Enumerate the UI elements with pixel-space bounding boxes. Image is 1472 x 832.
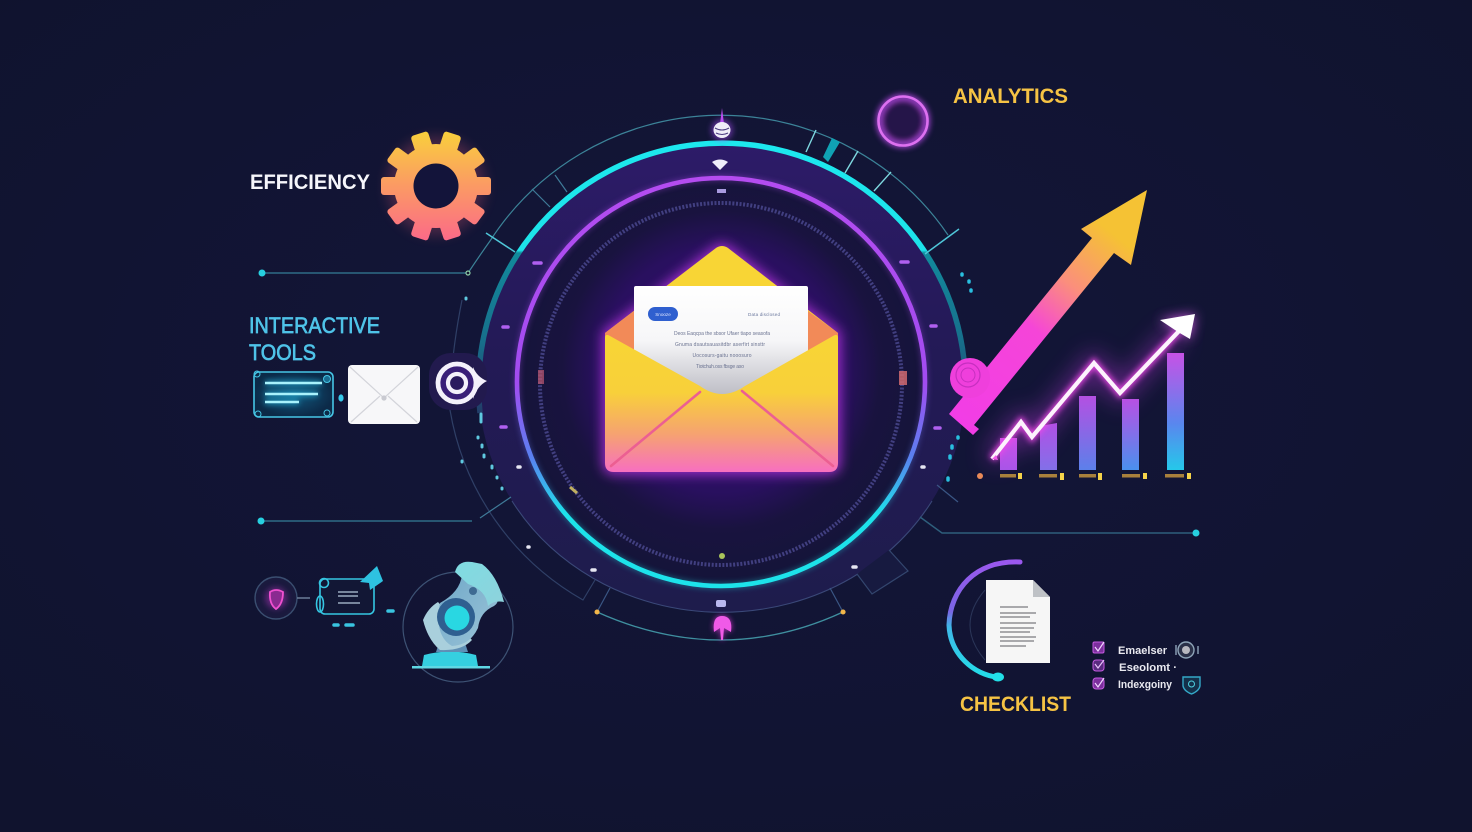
right connector	[920, 517, 1200, 536]
icon: eye target	[429, 353, 487, 410]
big rising arrow	[949, 190, 1147, 435]
icon: send card	[316, 566, 383, 614]
dotted text ring	[540, 203, 902, 565]
interactive tools label: TOOLS	[249, 340, 316, 365]
top icon: spike	[720, 108, 724, 124]
checklist section	[949, 562, 1200, 716]
side marker right	[899, 371, 907, 385]
badge connector	[297, 597, 310, 599]
icon: gear hole	[413, 163, 459, 209]
icon: message card	[254, 371, 333, 417]
letter body text: Uocosurs-gaitu nooosuro	[692, 353, 752, 359]
checklist items	[1093, 642, 1200, 694]
bars	[1000, 353, 1184, 470]
icon: robot arm	[403, 562, 513, 682]
pink bottom icon glow	[714, 616, 731, 640]
item labels: Indexgoiny	[1118, 679, 1173, 691]
lower left automation section	[255, 518, 513, 682]
checkbox 2	[1093, 660, 1104, 671]
lower-right box	[857, 550, 908, 594]
central envelope	[605, 246, 838, 472]
icon: analytics ring	[878, 96, 928, 146]
document icon	[986, 580, 1050, 663]
purple band glyphs	[501, 262, 940, 428]
top icon: chevron	[712, 160, 728, 170]
icon: analytics ring glow	[879, 97, 927, 145]
axis squares	[1018, 473, 1191, 480]
card dot	[338, 394, 344, 402]
side marker left	[538, 370, 544, 384]
letter body text	[674, 331, 770, 370]
lower teal arc	[597, 612, 843, 640]
bottom band icon	[716, 600, 726, 607]
letter body text: Deos Eaqcpa the sbsor Ufaer tiapo seasofa	[674, 331, 770, 337]
inner faint arc	[970, 590, 985, 660]
interactive tools section	[249, 313, 487, 424]
checklist label: CHECKLIST	[960, 692, 1071, 716]
back flap	[605, 246, 838, 380]
top ticks	[806, 130, 891, 191]
efficiency label: EFFICIENCY	[250, 170, 370, 194]
gradient ring glow	[517, 178, 925, 586]
interactive tools label	[249, 313, 380, 365]
item labels: Emaelser	[1118, 645, 1168, 657]
item labels: Eseolomt ·	[1119, 662, 1177, 674]
inner flap shade	[605, 311, 838, 380]
bar chart with trend line	[977, 314, 1195, 480]
right side dots	[948, 274, 971, 480]
trend start tip	[992, 455, 998, 460]
gradient ring	[517, 178, 925, 586]
envelope fold lines	[611, 391, 833, 466]
top icon: dome	[714, 122, 730, 138]
checkbox 3	[1093, 678, 1104, 689]
connector end node	[466, 271, 470, 275]
envelope glow	[605, 246, 838, 472]
analytics section	[878, 84, 1068, 146]
envelope front pocket	[605, 335, 838, 472]
top icon: small bar	[717, 189, 726, 193]
blue pill button	[648, 307, 678, 321]
faint side ticks	[480, 175, 567, 518]
arrow base rose	[950, 358, 990, 398]
letter	[634, 286, 808, 396]
upper cyan ring	[479, 143, 964, 413]
bottom band dots	[518, 467, 924, 570]
icon: badge	[1176, 642, 1198, 658]
icon: shield badge	[255, 577, 297, 619]
letter body text: Tiotchuh.oss fbsge aso	[696, 364, 744, 370]
icon: gear glow	[386, 136, 486, 236]
lower arc connectors	[597, 485, 958, 612]
connector dot	[258, 270, 266, 276]
icon: white envelope	[348, 365, 420, 424]
letter body text: Gnuma dsautsauasitdbr aserfirt sinsttr	[675, 342, 765, 348]
central ring dial	[450, 108, 971, 640]
icon: gear	[381, 132, 491, 240]
trend arrow head	[1160, 314, 1195, 339]
cyan side ticks	[486, 229, 959, 254]
axis ticks	[1000, 474, 1184, 478]
icon: shield	[1183, 677, 1200, 694]
left thin arc	[450, 300, 595, 600]
analytics label: ANALYTICS	[953, 84, 1068, 108]
connector line	[261, 520, 472, 522]
band lower outline	[512, 501, 932, 612]
connector dot	[258, 518, 264, 524]
trend line outer haze	[992, 332, 1178, 459]
checkbox 1	[1093, 642, 1104, 653]
core disc	[517, 178, 925, 586]
pink bottom icon	[714, 616, 731, 640]
connector dot	[1192, 530, 1200, 536]
item labels	[1118, 645, 1177, 691]
orange marker	[977, 473, 983, 479]
letter header text: Data disclosed	[748, 312, 780, 317]
small cyan marks	[334, 611, 393, 625]
progress arc	[949, 562, 1020, 677]
outer band disc	[479, 145, 965, 612]
amber nodes	[597, 610, 843, 614]
outer thin ring	[468, 115, 948, 273]
efficiency section	[251, 130, 492, 276]
teal marker	[823, 138, 840, 162]
arc end cap	[992, 672, 1004, 682]
pill label: Snooze	[655, 312, 671, 317]
trend line glow	[992, 332, 1178, 459]
top icon: dome glow	[711, 119, 733, 141]
interactive tools label: INTERACTIVE	[249, 313, 380, 338]
left side dots	[462, 298, 502, 489]
trend arrow glow	[1160, 314, 1195, 339]
green marker	[719, 553, 725, 559]
connector line	[262, 272, 466, 274]
yellow ring glyph	[570, 487, 577, 493]
trend line	[992, 330, 1180, 459]
arrow shape	[949, 190, 1147, 435]
letter sheet	[634, 286, 808, 396]
